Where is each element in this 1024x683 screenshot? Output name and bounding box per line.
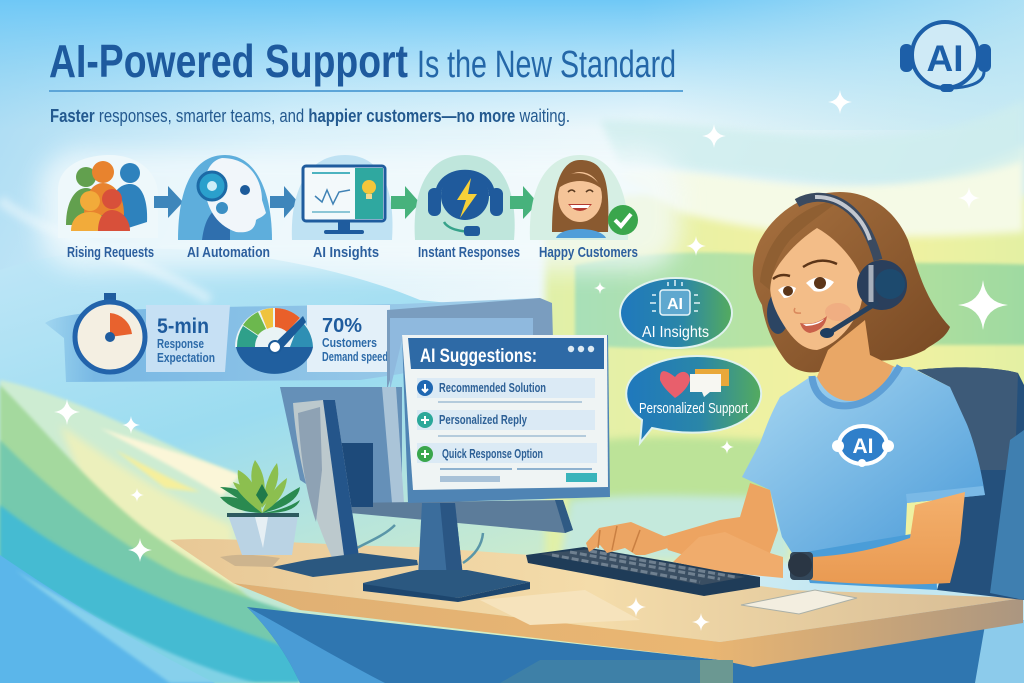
subtitle: Faster responses, smarter teams, and happier customers—no more waiting. — [50, 106, 570, 126]
arrow — [510, 186, 538, 219]
title: Is the New Standard — [417, 44, 676, 86]
back panel — [280, 387, 402, 513]
arrow — [391, 186, 420, 219]
plant — [220, 460, 300, 555]
AI suggestions window — [402, 335, 608, 490]
arrow — [154, 186, 183, 218]
agent woman — [662, 192, 985, 590]
step: AI automation robot — [178, 155, 272, 240]
paper on desk — [741, 590, 857, 614]
window dots — [568, 346, 594, 352]
option: quick response — [417, 443, 597, 482]
step labels: Rising Requests — [67, 244, 154, 261]
step: rising requests — [58, 155, 158, 238]
AI suggestions window: AI Suggestions: — [420, 346, 537, 367]
option: quick response: Quick Response Option — [442, 447, 543, 461]
hair back — [753, 192, 950, 372]
title underline — [49, 90, 683, 92]
stats band — [45, 293, 540, 382]
stat: 5-min stopwatch: 5-min — [157, 315, 209, 338]
badge: personalized support bubble: Personalized Support — [639, 400, 749, 417]
hands — [586, 522, 783, 578]
dark lower leaves — [220, 487, 300, 513]
rear monitor — [387, 298, 553, 390]
option: recommended solution — [417, 378, 595, 403]
badge: personalized support bubble — [626, 356, 761, 443]
face — [770, 228, 863, 350]
watch — [788, 552, 813, 580]
option: personalized reply: Personalized Reply — [439, 413, 527, 427]
monitor bezel — [402, 335, 610, 503]
option: personalized reply — [417, 410, 595, 437]
step labels — [67, 244, 638, 261]
stat: 5-min stopwatch: Expectation — [157, 350, 215, 365]
arrow — [270, 186, 298, 218]
monitor setup — [272, 298, 610, 602]
smile — [800, 316, 827, 333]
neck — [817, 320, 895, 407]
stat: 5-min stopwatch — [75, 293, 230, 372]
process flow panel — [40, 150, 680, 270]
logo: AI headset — [900, 22, 991, 92]
side monitor — [272, 400, 418, 577]
light upper leaves — [233, 460, 287, 513]
right arm — [810, 492, 965, 584]
cables — [357, 525, 483, 563]
option: recommended solution: Recommended Solution — [439, 381, 546, 395]
right earcup — [857, 260, 907, 310]
step: AI insights monitor — [292, 155, 392, 240]
step labels: AI Insights — [313, 244, 379, 261]
logo on shirt: AI — [852, 435, 874, 458]
lower back housing — [347, 500, 573, 533]
step: happy customer — [530, 155, 638, 240]
left earcup — [767, 292, 789, 334]
keyboard — [526, 547, 760, 596]
logo: AI headset: AI — [926, 38, 964, 79]
logo on shirt — [832, 426, 894, 467]
hair front — [760, 200, 840, 290]
step labels: AI Automation — [187, 244, 270, 261]
headset band — [797, 197, 878, 260]
sparkles — [54, 90, 1008, 631]
shirt — [742, 366, 985, 590]
stat: 70% gauge — [235, 305, 390, 374]
badge: AI insights: AI Insights — [642, 324, 709, 341]
blush — [825, 303, 851, 321]
badge: AI insights: AI — [667, 296, 683, 313]
step labels: Happy Customers — [539, 244, 638, 261]
main stand — [363, 503, 530, 602]
stat: 70% gauge: 70% — [322, 315, 362, 337]
chair — [917, 367, 1024, 600]
stat: 70% gauge: Customers — [322, 335, 377, 350]
panel glow — [40, 150, 680, 270]
left arm — [662, 483, 778, 560]
stat: 5-min stopwatch: Response — [157, 336, 204, 351]
microphone — [820, 302, 878, 338]
badge: AI insights — [620, 278, 732, 348]
step labels: Instant Responses — [418, 244, 520, 261]
title: AI-Powered Support — [49, 35, 408, 87]
stat: 70% gauge: Demand speed — [322, 349, 388, 364]
desk — [170, 539, 1023, 683]
eyes — [773, 261, 837, 313]
navy box — [338, 443, 373, 507]
step: instant responses headset — [415, 155, 515, 240]
